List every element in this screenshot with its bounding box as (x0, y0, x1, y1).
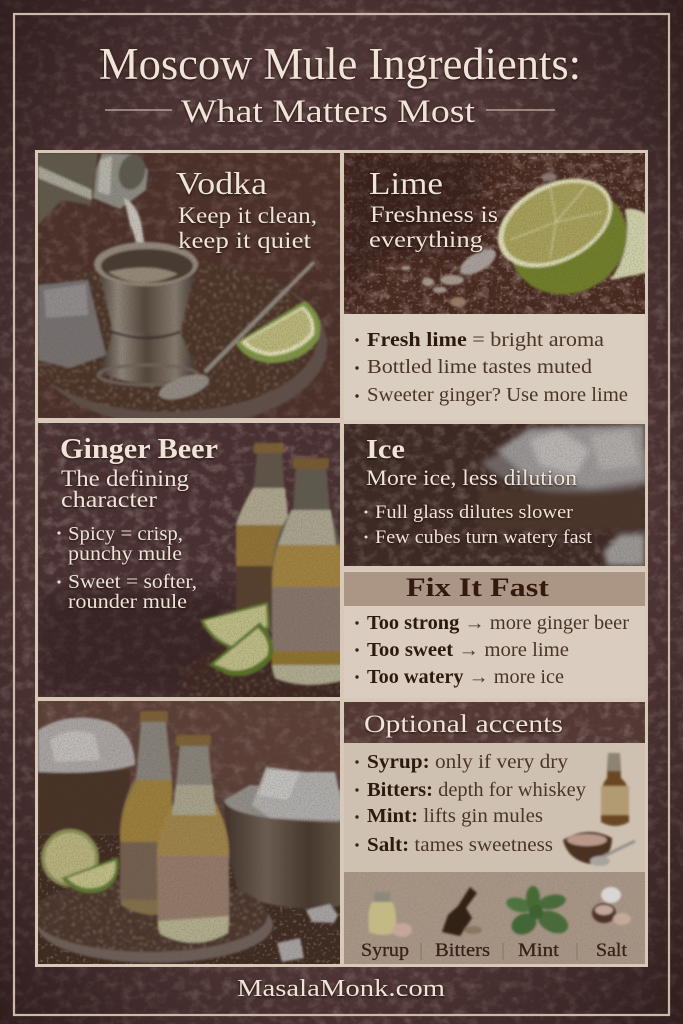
labels: ingredient names: Salt (596, 941, 628, 961)
footer: website: MasalaMonk.com (237, 976, 445, 1002)
text: accents list (355, 751, 586, 856)
icon: back bottle (120, 711, 172, 915)
icon: jigger (94, 242, 198, 385)
text: ginger beer bullets (57, 523, 197, 613)
text: lime tagline: everything (369, 227, 484, 252)
panel: lime (344, 153, 650, 420)
icon: ice pieces (276, 902, 339, 964)
icon: lime slices (41, 829, 119, 893)
icon: front bottle (157, 735, 229, 943)
text: accents list: Salt: tames sweetness (367, 834, 553, 856)
icon: mint sprig (505, 886, 572, 939)
icon: pouring stream (123, 198, 146, 244)
icon: vodka bottle (38, 151, 149, 225)
subtitle: What Matters Most (181, 94, 475, 130)
icon: metal ice bucket (224, 767, 345, 908)
icon: ice chunk (603, 534, 645, 566)
text: ice bullets (364, 502, 593, 548)
text: vodka tagline: Keep it clean, (178, 203, 317, 228)
icon: stone board (38, 262, 328, 418)
text: ginger beer bullets: punchy mule (68, 543, 182, 565)
icon: ice bowl (480, 424, 650, 530)
text: ginger beer tagline (61, 466, 190, 512)
panel: lime tips (344, 314, 645, 420)
text: ginger beer tagline: The defining (61, 466, 190, 491)
heading band: fix it fast (344, 572, 645, 606)
text: accents list: Mint: lifts gin mules (367, 805, 543, 827)
panel: lime tips: Sweeter ginger? Use more lime (367, 384, 628, 406)
text: fixes list: Too sweet → more lime (367, 640, 569, 661)
icon: wooden coaster (183, 646, 340, 697)
labels: ingredient names (361, 941, 628, 961)
text: vodka tagline: keep it quiet (178, 228, 312, 253)
icon: front bottle (272, 458, 344, 685)
text: lime tagline: Freshness is (370, 202, 498, 227)
text: ice bullets: Few cubes turn watery fast (375, 527, 593, 548)
text: fixes list (355, 613, 630, 688)
heading: vodka: Vodka (176, 165, 267, 201)
heading band: optional accents (344, 702, 645, 743)
panel: optional accents (344, 702, 645, 964)
title (99, 39, 581, 130)
icon: bitters dropper (442, 887, 482, 936)
labels: ingredient names: Bitters (435, 941, 490, 961)
icon: lime wedges (200, 602, 274, 676)
icon: syrup jar (368, 892, 412, 937)
text: ginger beer bullets: rounder mule (68, 591, 187, 613)
icon: second lime (610, 209, 650, 280)
text: accents list: Syrup: only if very dry (367, 751, 568, 773)
icon: bar spoon (156, 262, 314, 405)
heading band: fix it fast: Fix It Fast (406, 573, 549, 602)
text: ice tagline: More ice, less dilution (366, 465, 577, 490)
panel: fix it fast (344, 571, 645, 698)
icon: stone coaster (32, 878, 273, 963)
text: ginger beer tagline: character (61, 487, 157, 512)
strip: ingredient icons (344, 872, 645, 964)
heading: lime: Lime (369, 165, 443, 201)
panel: grid frame (35, 150, 648, 967)
icon: lime wedge (236, 301, 320, 363)
icon: ice cube (38, 280, 106, 368)
icon: salt chunks (592, 887, 631, 925)
text: lime tagline (369, 202, 498, 252)
icon: halved lime (496, 177, 628, 296)
text: vodka tagline (178, 203, 317, 253)
panel: ice (344, 424, 650, 566)
heading: ginger beer: Ginger Beer (60, 434, 218, 465)
text: ginger beer bullets: Spicy = crisp, (68, 523, 183, 545)
text: fixes list: Too strong → more ginger beer (367, 613, 630, 634)
title: Moscow Mule Ingredients: (99, 39, 581, 89)
panel: bottles and ice photo (32, 701, 345, 964)
panel: lime tips: Bottled lime tastes muted (367, 356, 592, 378)
labels: ingredient names: Mint (518, 941, 560, 961)
icon: salt specks (401, 173, 557, 307)
text: accents list: Bitters: depth for whiskey (367, 779, 586, 801)
panel: vodka (18, 151, 340, 427)
text: ginger beer bullets: Sweet = softer, (68, 571, 197, 593)
panel: ginger beer (38, 423, 340, 697)
text: ice bullets: Full glass dilutes slower (375, 502, 574, 523)
heading: ice: Ice (366, 434, 405, 464)
icon: amber bottle (601, 753, 629, 826)
icon: crushed ice bowl (38, 718, 135, 835)
icon: salt bowl and spoon (563, 832, 635, 866)
heading band: optional accents: Optional accents (364, 711, 563, 738)
text: fixes list: Too watery → more ice (367, 667, 564, 688)
icon: back bottle (236, 443, 290, 628)
labels: ingredient names: Syrup (361, 941, 409, 961)
panel: lime tips: Fresh lime = bright aroma (367, 329, 604, 351)
